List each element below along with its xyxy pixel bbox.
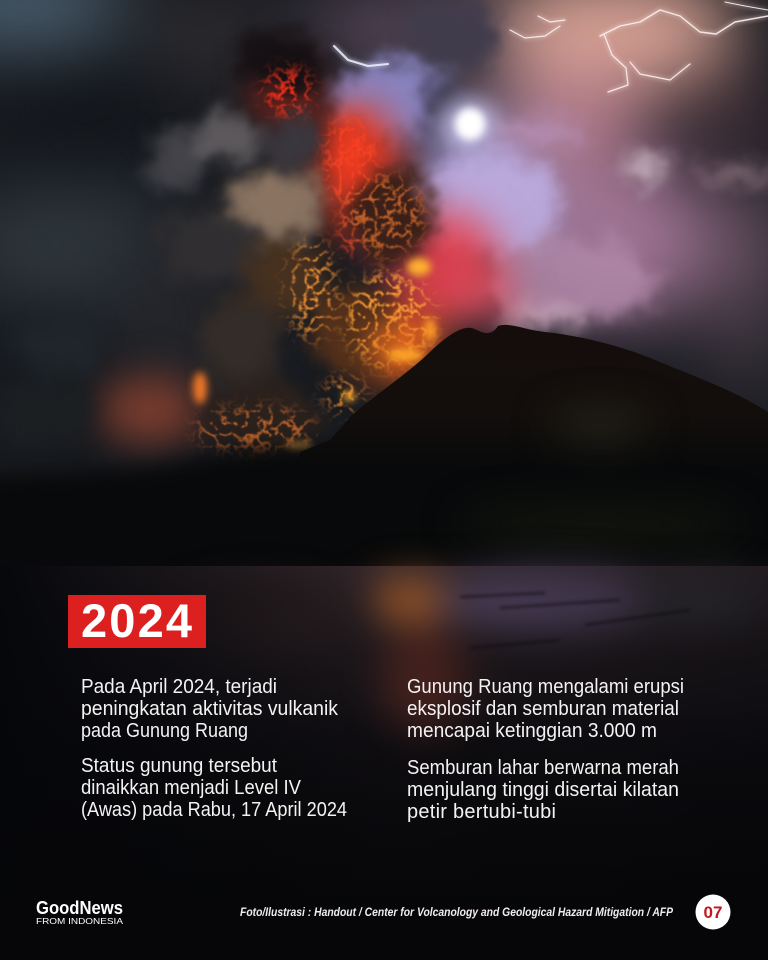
mountain: dark volcano silhouette [300,325,768,480]
badge: year 2024: 2024 [81,594,192,647]
text block: left column, second paragraph: dinaikkan menjadi Level IV [81,777,302,799]
glow: incandescent hot spots [193,258,436,449]
water: lake with eruption reflection [0,566,768,960]
vignette: left and bottom darkening [0,566,768,960]
text block: left column, first paragraph: pada Gunung Ruang [81,720,248,742]
page number badge [696,894,730,930]
text block: left column, second paragraph: Status gunung tersebut [81,755,277,777]
page number badge: 07 [704,903,722,922]
glow: lightning flash [438,98,498,150]
text block: right column, second paragraph: petir bertubi-tubi [407,801,556,823]
logo: GoodNews from Indonesia: FROM INDONESIA [36,916,123,926]
text block: left column, second paragraph [81,755,347,821]
text block: left column, first paragraph: peningkatan aktivitas vulkanik [81,698,339,720]
text block: right column, first paragraph: eksplosif dan semburan material [407,698,679,720]
land: dark shoreline fading into the smoke [0,440,768,640]
text block: right column, first paragraph [407,676,684,742]
land: dim vegetation tones [460,413,740,543]
logo: GoodNews from Indonesia: GoodNews [36,898,123,918]
glow: red fire light in the smoke [98,65,518,444]
photo credit: Foto/Ilustrasi : Handout / Center for Volcanology and Geological Hazard Mitigation / AFP [240,907,673,919]
lightning bolts [334,2,768,92]
cloud: lavender and pink billows [333,0,768,332]
text block: right column, first paragraph: Gunung Ruang mengalami erupsi [407,676,684,698]
sky: dark smoke and storm clouds [0,0,768,445]
smoke: dark ash column [0,30,436,453]
text block: right column, second paragraph [407,757,679,823]
logo: GoodNews from Indonesia [36,898,123,926]
text block: left column, first paragraph: Pada April 2024, terjadi [81,676,277,698]
text block: left column, first paragraph [81,676,339,742]
text block: right column, second paragraph: Semburan lahar berwarna merah [407,757,679,779]
lava: glowing veins in the column [195,68,434,452]
text block: right column, second paragraph: menjulang tinggi disertai kilatan [407,779,679,801]
text block: right column, first paragraph: mencapai ketinggian 3.000 m [407,720,657,742]
text block: left column, second paragraph: (Awas) pada Rabu, 17 April 2024 [81,799,347,821]
